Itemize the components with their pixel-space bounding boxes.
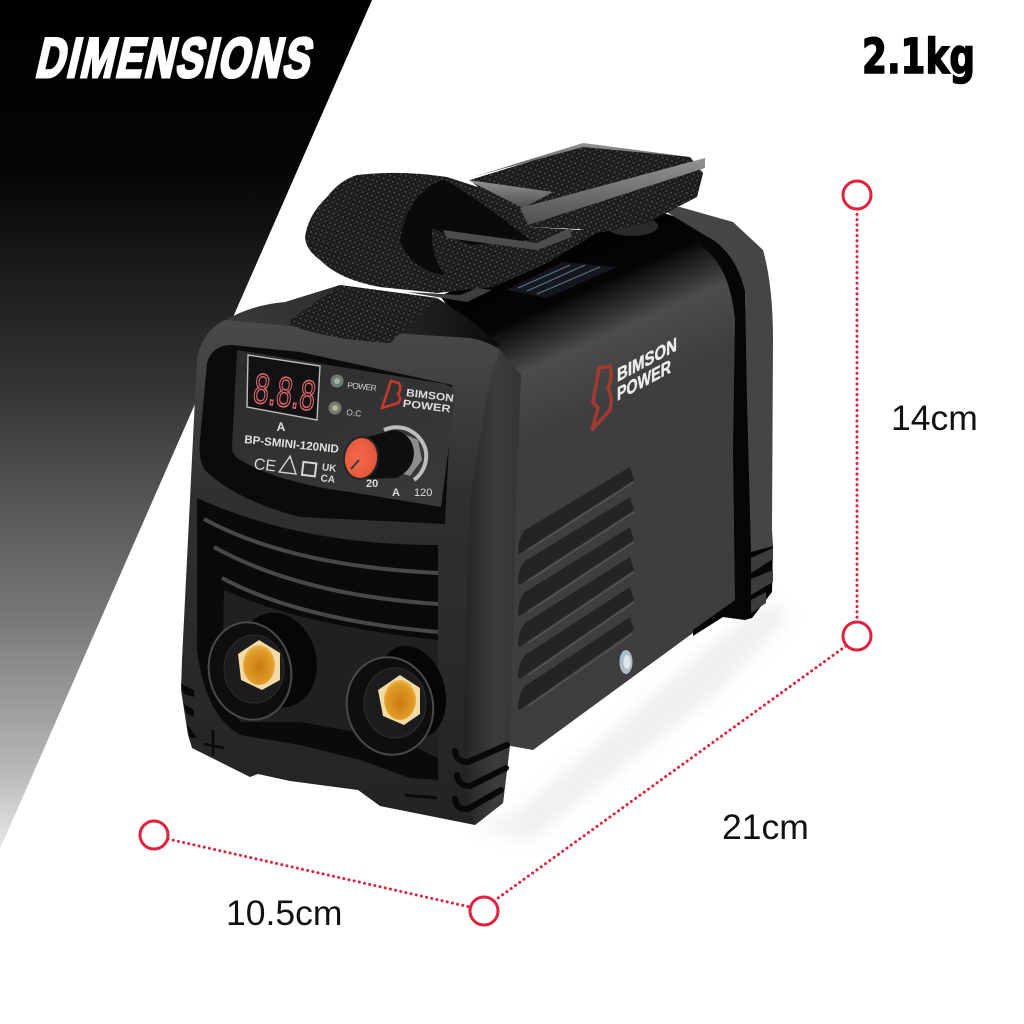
- power LED: [330, 374, 344, 388]
- control panel: [232, 350, 455, 507]
- certification marks: UK: [321, 462, 338, 475]
- dial labels: 20: [366, 478, 378, 490]
- display: [247, 355, 320, 420]
- rating label: [507, 262, 617, 298]
- welder product: [181, 205, 773, 825]
- right output socket: [338, 638, 456, 763]
- side logo mark: [592, 366, 611, 430]
- height dimension line: [856, 209, 858, 622]
- left ribs: [181, 684, 197, 738]
- product shadow: [470, 600, 790, 840]
- strap under buckle: [470, 145, 703, 230]
- front logo text: POWER: [402, 398, 452, 416]
- side logo text: POWER: [617, 356, 671, 406]
- power label: POWER: [347, 380, 378, 393]
- control panel recess: [200, 345, 452, 524]
- front logo mark: [382, 381, 400, 408]
- foot ribs: [455, 745, 507, 809]
- dial scale: [384, 427, 426, 480]
- certification marks: CA: [320, 473, 336, 486]
- overcurrent LED: [328, 402, 342, 414]
- width dimension line: [168, 839, 470, 907]
- strap loop inner fold: [400, 180, 530, 275]
- weight label: 2.1kg: [862, 29, 975, 85]
- display: 8.8.8: [251, 364, 319, 420]
- side panel screw: [620, 650, 632, 674]
- lower buckle: [443, 228, 572, 250]
- dial labels: 120: [414, 487, 432, 499]
- side panel: [440, 205, 738, 750]
- rear black groove: [693, 236, 773, 636]
- upper buckle: [468, 143, 705, 225]
- front logo text: BIMSON: [405, 387, 454, 405]
- rear strap anchor: [606, 216, 658, 236]
- front logo text: [402, 387, 454, 416]
- top hump behind strap: [222, 285, 500, 350]
- certification marks: CE: [253, 456, 277, 476]
- carry strap: [290, 143, 705, 343]
- depth label: 21cm: [722, 807, 809, 847]
- dial labels: A: [392, 487, 400, 499]
- dial knob: [341, 430, 422, 481]
- side vents: [518, 467, 634, 709]
- title: DIMENSIONS: [31, 28, 321, 90]
- plus symbol: [204, 730, 224, 756]
- left output socket: [200, 604, 327, 727]
- rear bezel: [660, 207, 773, 613]
- minus symbol: [405, 794, 437, 799]
- depth dimension line: [494, 646, 846, 901]
- vent louvres: [204, 519, 438, 632]
- strap lower band: [290, 285, 437, 343]
- width label: 10.5cm: [226, 893, 342, 933]
- model label: BP-SMINI-120NID: [244, 434, 339, 456]
- small strap slider: [407, 288, 492, 302]
- front frame: [181, 320, 521, 825]
- dial labels: [366, 478, 432, 499]
- overcurrent label: O.C: [346, 407, 362, 419]
- side logo text: BIMSON: [617, 334, 677, 387]
- background wedge: [0, 0, 372, 849]
- strap main loop: [305, 173, 703, 293]
- front corner bevel: [462, 350, 521, 825]
- vent recess: [197, 498, 438, 780]
- certification marks: [252, 452, 338, 486]
- lower socket panel: [222, 590, 438, 758]
- measure points: [140, 181, 871, 925]
- height label: 14cm: [891, 398, 978, 438]
- amp label: A: [277, 420, 286, 434]
